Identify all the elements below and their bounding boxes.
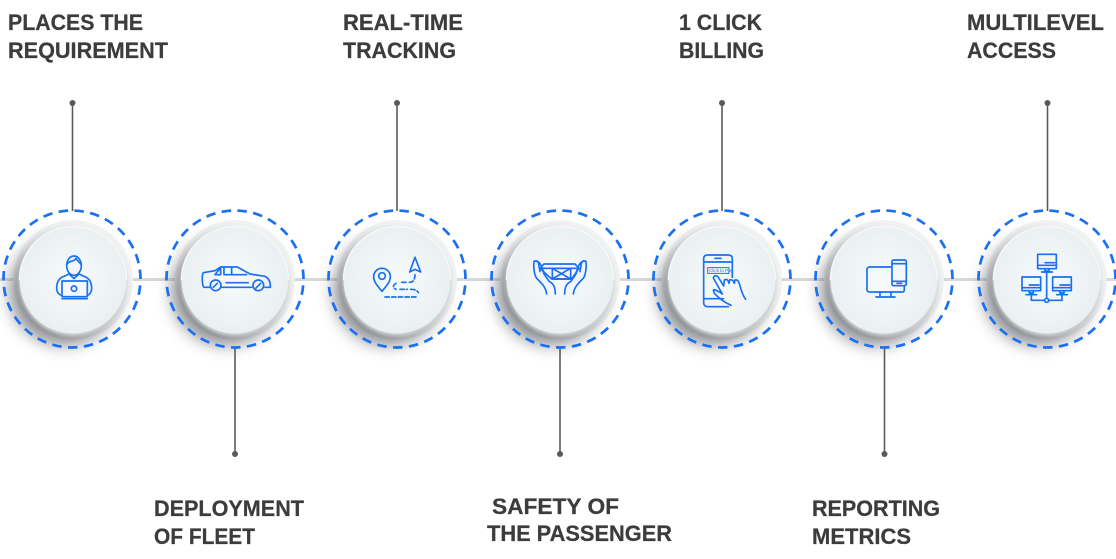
icon: car: [202, 267, 270, 291]
icon: map pin and route: [374, 257, 421, 297]
heading: deployment of fleet: DEPLOYMENT: [154, 496, 304, 521]
heading: real-time tracking: [343, 10, 463, 63]
stem 2: [232, 347, 238, 457]
dashed ring 4: [489, 208, 631, 350]
heading: multilevel access: MULTILEVEL: [967, 10, 1104, 35]
node 2: deployment of fleet: [154, 208, 306, 549]
heading: multilevel access: ACCESS: [967, 38, 1056, 63]
heading: reporting metrics: REPORTING: [812, 496, 940, 521]
icon: hands holding box: [534, 261, 586, 294]
dashed ring 7: [976, 208, 1116, 350]
heading: real-time tracking: REAL-TIME: [343, 10, 463, 35]
disc 3: [334, 220, 457, 345]
icon: person with laptop: [57, 256, 92, 299]
icon: networked computers: [1022, 254, 1071, 302]
icon label: click to pay: Click to Pay: [709, 268, 734, 273]
icon: phone with hand: [704, 255, 746, 307]
heading: places the requirement: [8, 10, 168, 63]
heading: deployment of fleet: OF FLEET: [154, 524, 255, 549]
disc 7: [984, 220, 1107, 345]
node 1: places the requirement: [1, 10, 168, 350]
stem 4: [557, 347, 563, 457]
heading: places the requirement: PLACES THE: [8, 10, 143, 35]
heading: 1 click billing: [679, 10, 764, 63]
stem 6: [882, 347, 888, 457]
stem 5: [719, 100, 725, 211]
stem 7: [1044, 100, 1050, 211]
heading: deployment of fleet: [154, 496, 304, 549]
heading: 1 click billing: BILLING: [679, 38, 764, 63]
disc 1: [10, 220, 133, 345]
dashed ring 2: [164, 208, 306, 350]
node 7: multilevel access: [967, 10, 1116, 350]
node 3: real-time tracking: [326, 10, 468, 350]
node 5: 1 click billing: [651, 10, 793, 350]
stem 1: [70, 100, 76, 211]
heading: reporting metrics: METRICS: [812, 524, 911, 549]
disc 6: [821, 220, 944, 345]
heading: safety of the passenger: [487, 494, 672, 546]
heading: real-time tracking: TRACKING: [343, 38, 456, 63]
node 4: safety of the passenger: [487, 208, 672, 546]
heading: multilevel access: [967, 10, 1104, 63]
heading: reporting metrics: [812, 496, 940, 549]
dashed ring 5: [651, 208, 793, 350]
dashed ring 1: [1, 208, 143, 350]
dashed ring 6: [813, 208, 955, 350]
icon: desktop and phone: [867, 260, 906, 297]
heading: places the requirement: REQUIREMENT: [8, 38, 168, 63]
disc 4: [497, 220, 620, 345]
stem 3: [394, 100, 400, 211]
heading: 1 click billing: 1 CLICK: [679, 10, 763, 35]
dashed ring 3: [326, 208, 468, 350]
disc 5: [659, 220, 782, 345]
connector line: [0, 278, 1116, 281]
node 6: reporting metrics: [812, 208, 955, 549]
heading: safety of the passenger: THE PASSENGER: [487, 521, 672, 546]
disc 2: [172, 220, 295, 345]
heading: safety of the passenger: SAFETY OF: [492, 494, 619, 519]
